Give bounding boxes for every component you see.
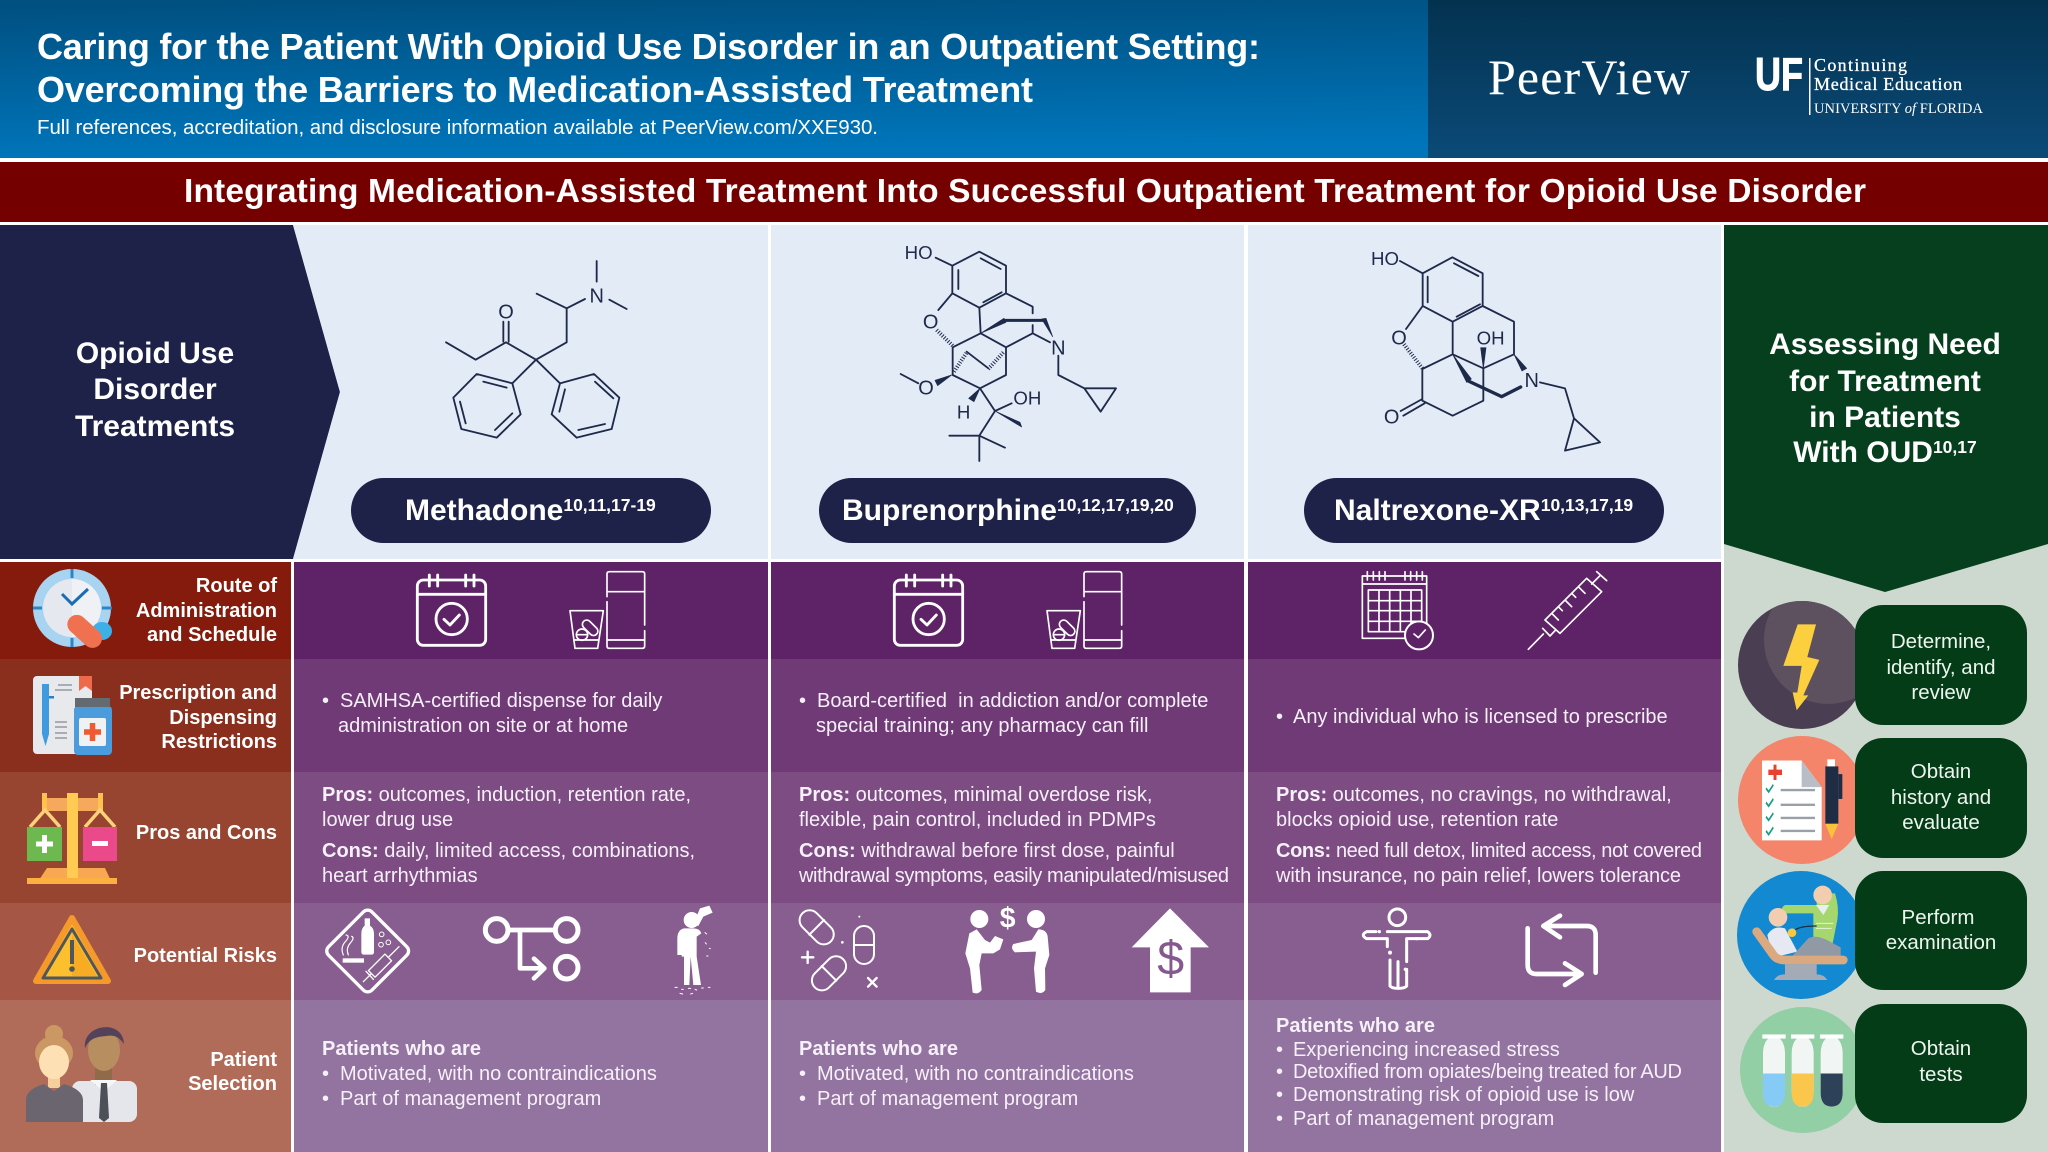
drug name pill: naltrexone-XR: Naltrexone-XR: [1334, 494, 1541, 527]
title: [37, 26, 1260, 110]
step: determine, identify, and review: [1855, 605, 2027, 725]
icon: syringe: [1528, 572, 1607, 649]
row: patient selection: Part of management program: [340, 1088, 601, 1110]
row: prescription restrictions: Board-certified in addiction and/or complete: [817, 690, 1208, 712]
row label: patient selection: Selection: [188, 1073, 277, 1095]
drug name pill: methadone: Methadone: [405, 494, 563, 527]
methadone chemical structure: O: [498, 302, 514, 324]
header background: title area: [0, 0, 1428, 158]
row label: patient selection: [0, 1000, 291, 1152]
row: potential risks: [1248, 903, 1721, 1000]
header panel: methadone structure and name: [293, 225, 768, 559]
icon: calendar check: [417, 575, 486, 645]
heading chevron: Assessing Need: [1769, 328, 2001, 361]
icon: repeat arrows: [1528, 916, 1596, 985]
icon: lightning bolt: [1738, 601, 1856, 729]
row: patient selection: Patients who are: [1276, 1015, 1435, 1037]
row: patient selection: Motivated, with no contraindications: [340, 1063, 657, 1085]
buprenorphine chemical structure: N: [1051, 337, 1066, 359]
icon: person with arms outstretched: [1363, 909, 1430, 988]
icon: test tubes: [1740, 1007, 1866, 1133]
row: patient selection: Patients who are: [799, 1038, 958, 1060]
logo: UF Continuing Medical Education: Medical Education: [1814, 74, 1962, 94]
icon: rising cost arrow: $: [1157, 932, 1184, 986]
methadone chemical structure: [446, 261, 627, 438]
logo: UF Continuing Medical Education: [1755, 48, 1984, 117]
row label: prescription and dispensing restrictions: Prescription and: [119, 682, 277, 704]
row: pros and cons: Cons: withdrawal before first dose, painful: [799, 840, 1175, 862]
logo: UF Continuing Medical Education: UNIVERSITY of FLORIDA: [1814, 101, 1984, 117]
row label: potential risks: [0, 903, 291, 1000]
icon: person drinking from bottle: [675, 906, 713, 994]
reference note: Full references, accreditation, and disclosure information available at PeerView.com/XXE930.: [37, 116, 878, 139]
row: patient selection: •: [322, 1088, 329, 1110]
row: prescription restrictions: •: [1276, 706, 1283, 728]
icon: checklist and pen: [1738, 736, 1866, 864]
drug name pill: buprenorphine: 10,12,17,19,20: [1057, 495, 1174, 515]
row: patient selection: Motivated, with no contraindications: [817, 1063, 1134, 1085]
row: route of administration: [1248, 562, 1721, 659]
step: obtain history and evaluate: history and: [1891, 786, 1991, 809]
buprenorphine chemical structure: O: [923, 311, 938, 333]
drug name pill: buprenorphine: [819, 478, 1196, 543]
row: pros and cons: Pros: outcomes, no cravings, no withdrawal,: [1276, 784, 1672, 806]
row: patient selection: [1248, 1000, 1721, 1152]
step: perform examination: Perform: [1902, 906, 1974, 929]
row: pros and cons: [294, 772, 768, 903]
logo: UF Continuing Medical Education: UF: [1755, 48, 1803, 100]
row label: patient selection: Patient: [210, 1049, 277, 1071]
step: obtain tests: Obtain: [1911, 1037, 1971, 1060]
row: prescription restrictions: [771, 659, 1244, 772]
row: pros and cons: withdrawal symptoms, easily manipulated/misused: [798, 865, 1229, 887]
icon: clinician examining patient: [1737, 871, 1865, 999]
right panel: assessing need for treatment: [1724, 225, 2048, 1152]
icon: two people exchanging money: $: [1000, 903, 1016, 935]
row: prescription restrictions: SAMHSA-certified dispense for daily: [340, 690, 662, 712]
heading arrow: opioid use disorder treatments: Disorder: [93, 373, 217, 406]
row: potential risks: [294, 903, 768, 1000]
row: patient selection: Detoxified from opiates/being treated for AUD: [1293, 1061, 1682, 1083]
drug name pill: buprenorphine: Buprenorphine: [842, 494, 1057, 527]
logo: UF Continuing Medical Education: Continuing: [1814, 55, 1907, 75]
buprenorphine chemical structure: OH: [1013, 388, 1041, 409]
row: pros and cons: [771, 772, 1244, 903]
row: pros and cons: Pros: outcomes, minimal overdose risk,: [799, 784, 1152, 806]
row: potential risks: [771, 903, 1244, 1000]
drug name pill: methadone: [351, 478, 711, 543]
row label: pros and cons: Pros and Cons: [136, 822, 277, 844]
naltrexone chemical structure: [1371, 248, 1600, 451]
row: prescription restrictions: [1248, 659, 1721, 772]
row: prescription restrictions: Any individual who is licensed to prescribe: [1293, 706, 1668, 728]
heading chevron: for Treatment: [1789, 365, 1981, 398]
heading arrow: opioid use disorder treatments: [0, 225, 340, 559]
header panel: naltrexone structure and name: [1248, 225, 1721, 559]
heading arrow: opioid use disorder treatments: Treatments: [75, 410, 235, 443]
row label: route of administration and schedule: and Schedule: [147, 624, 277, 646]
row: pros and cons: Cons: need full detox, limited access, not covered: [1276, 840, 1702, 862]
row: route of administration: [294, 562, 768, 659]
icon: clock and pill: [33, 569, 112, 652]
row label: prescription and dispensing restrictions: Dispensing: [169, 707, 277, 729]
step: obtain tests: [1855, 1004, 2027, 1123]
buprenorphine chemical structure: H: [957, 401, 970, 422]
icon: two patients: [26, 1025, 137, 1122]
icon: balance scale: [27, 793, 117, 884]
icon: monthly calendar with clock: [1362, 572, 1433, 649]
row: prescription restrictions: administration on site or at home: [338, 715, 628, 737]
row: patient selection: •: [1276, 1084, 1283, 1106]
buprenorphine chemical structure: HO: [905, 242, 933, 263]
header panel: buprenorphine structure and name: [771, 225, 1244, 559]
row: pros and cons: with insurance, no pain relief, lowers tolerance: [1275, 865, 1681, 887]
banner: Integrating Medication-Assisted Treatment Into Successful Outpatient Treatment for Opioid Use Disorder: [184, 173, 1866, 210]
heading arrow: opioid use disorder treatments: Opioid Use: [76, 337, 234, 370]
row label: prescription and dispensing restrictions: [0, 659, 291, 772]
row: patient selection: Part of management program: [817, 1088, 1078, 1110]
naltrexone chemical structure: O: [1384, 407, 1399, 429]
step: perform examination: examination: [1886, 931, 1996, 954]
row: prescription restrictions: •: [799, 690, 806, 712]
row: patient selection: •: [1276, 1039, 1283, 1061]
drug name pill: naltrexone-XR: 10,13,17,19: [1541, 495, 1633, 515]
row: patient selection: Experiencing increased stress: [1293, 1039, 1560, 1061]
column: methadone: [293, 225, 768, 1152]
heading chevron: [1724, 225, 2048, 592]
row: patient selection: •: [1276, 1108, 1283, 1130]
step: determine, identify, and review: Determine,: [1891, 630, 1991, 653]
row: pros and cons: blocks opioid use, retention rate: [1276, 809, 1558, 831]
row: patient selection: Demonstrating risk of opioid use is low: [1293, 1084, 1635, 1106]
title: Caring for the Patient With Opioid Use Disorder in an Outpatient Setting:: [37, 26, 1260, 67]
header background: logo area: [1428, 0, 2048, 158]
row: pros and cons: flexible, pain control, included in PDMPs: [799, 809, 1156, 831]
naltrexone chemical structure: OH: [1477, 327, 1505, 348]
logo: PeerView: PeerView: [1488, 49, 1690, 105]
row: pros and cons: [1248, 772, 1721, 903]
methadone chemical structure: N: [589, 285, 604, 307]
row: patient selection: [771, 1000, 1244, 1152]
row label: route of administration and schedule: Route of: [196, 575, 277, 597]
step: obtain history and evaluate: [1855, 738, 2027, 858]
step: obtain history and evaluate: Obtain: [1911, 760, 1971, 783]
row: patient selection: Part of management program: [1293, 1108, 1554, 1130]
step: determine, identify, and review: review: [1911, 681, 1971, 704]
icon: glasses with dissolved medication: [570, 572, 645, 648]
row: patient selection: •: [799, 1088, 806, 1110]
left panel: row labels: [0, 225, 340, 1152]
icon: prescription pad and bottle: [33, 676, 112, 755]
step: perform examination: [1855, 871, 2027, 990]
row label: route of administration and schedule: Administration: [136, 600, 277, 622]
heading chevron: With OUD: [1793, 436, 1933, 469]
icon: substance use diamond: [324, 908, 411, 994]
row label: prescription and dispensing restrictions: Restrictions: [161, 731, 277, 753]
naltrexone chemical structure: N: [1524, 370, 1539, 392]
row: pros and cons: lower drug use: [322, 809, 453, 831]
banner: [0, 162, 2048, 222]
row: patient selection: Patients who are: [322, 1038, 481, 1060]
buprenorphine chemical structure: O: [918, 377, 934, 399]
icon: rising cost arrow: [1132, 908, 1209, 992]
step: obtain tests: tests: [1919, 1063, 1963, 1086]
row: patient selection: •: [322, 1063, 329, 1085]
row: pros and cons: Cons: daily, limited access, combinations,: [322, 840, 695, 862]
icon: two people exchanging money: [965, 903, 1049, 993]
step: obtain history and evaluate: evaluate: [1902, 811, 1980, 834]
title: Overcoming the Barriers to Medication-Assisted Treatment: [37, 69, 1033, 110]
row: prescription restrictions: special training; any pharmacy can fill: [816, 715, 1148, 737]
column: naltrexone-XR: [1248, 225, 1721, 1152]
row: pros and cons: heart arrhythmias: [322, 865, 478, 887]
row: pros and cons: Pros: outcomes, induction, retention rate,: [322, 784, 691, 806]
naltrexone chemical structure: O: [1391, 327, 1407, 349]
step: determine, identify, and review: identify, and: [1886, 656, 1996, 679]
row label: route of administration and schedule: [0, 562, 291, 659]
row label: potential risks: Potential Risks: [134, 945, 277, 967]
naltrexone chemical structure: HO: [1371, 248, 1399, 269]
row: patient selection: [294, 1000, 768, 1152]
drug name pill: methadone: 10,11,17-19: [563, 495, 656, 515]
row: prescription restrictions: [294, 659, 768, 772]
row: route of administration: [771, 562, 1244, 659]
heading chevron: 10,17: [1933, 437, 1977, 457]
icon: assorted capsules: [795, 906, 877, 995]
icon: diverging pathway: [485, 919, 578, 979]
row label: pros and cons: [0, 772, 291, 903]
header: [0, 0, 2048, 158]
buprenorphine chemical structure: [901, 242, 1116, 461]
row: patient selection: •: [1276, 1061, 1283, 1083]
column: buprenorphine: [771, 225, 1244, 1152]
heading chevron: in Patients: [1809, 401, 1961, 434]
row: patient selection: •: [799, 1063, 806, 1085]
icon: glasses with dissolved medication: [1047, 572, 1122, 648]
icon: calendar check: [894, 575, 963, 645]
icon: warning triangle: [36, 918, 108, 981]
drug name pill: naltrexone-XR: [1304, 478, 1664, 543]
row: prescription restrictions: •: [322, 690, 329, 712]
